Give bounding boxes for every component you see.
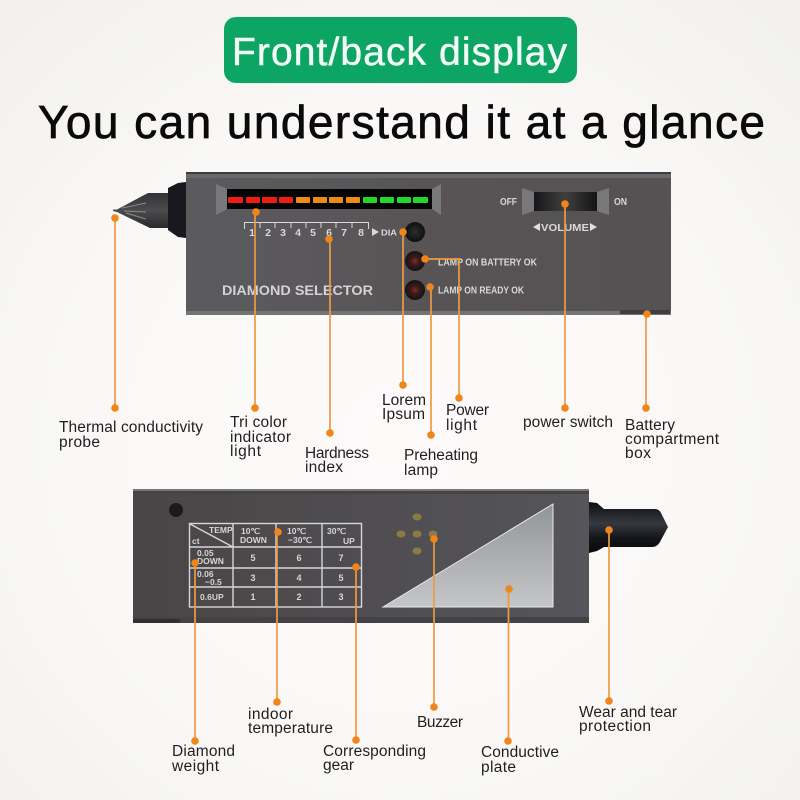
grade table: DOWN: [240, 535, 267, 545]
subtitle heading: You can understand it at a glance: [38, 96, 765, 148]
device body back: [133, 489, 589, 623]
grade table: 7: [338, 553, 344, 563]
callout: buzzer: Buzzer: [417, 714, 463, 731]
callout: hardness index: [305, 235, 369, 476]
callout: indoor temperature: indoor: [248, 706, 293, 723]
callout: hardness index: Hardness: [305, 445, 369, 462]
grade table: 30℃: [327, 526, 346, 536]
callouts: back device: [171, 526, 677, 776]
grade table: 2: [296, 592, 302, 602]
callout: thermal conductivity probe: [59, 214, 203, 451]
grade table: −0.5: [205, 577, 222, 587]
callout: thermal conductivity probe: Thermal conductivity: [59, 419, 203, 436]
callout: conductive plate: [481, 585, 559, 776]
conductive plate: [383, 504, 553, 607]
grade table: 10℃: [287, 526, 306, 536]
grade table: UP: [343, 536, 355, 546]
grade table: ct: [192, 536, 200, 546]
grade table: 0.05: [197, 548, 214, 558]
grade table: 6: [296, 553, 302, 563]
hardness scale: 1: [249, 227, 255, 239]
panel: back of device: [133, 489, 668, 623]
callout: power switch: [523, 200, 613, 431]
grade table: 5: [250, 553, 256, 563]
LED indicator meter: [216, 184, 441, 215]
title badge: [224, 17, 577, 83]
callout: corresponding gear: gear: [323, 757, 354, 774]
callout: power light: [421, 255, 489, 434]
grade table: 1: [250, 592, 256, 602]
volume switch: [500, 188, 627, 234]
icon: screw hole: [169, 503, 183, 517]
callout: power switch: power switch: [523, 414, 613, 431]
callout: conductive plate: plate: [481, 759, 516, 776]
callout: tri color indicator light: indicator: [230, 429, 291, 446]
callout: battery compartment box: [625, 310, 720, 462]
grade table: 3: [338, 592, 344, 602]
grade table: 0.6UP: [200, 592, 224, 602]
grade table: 4: [296, 573, 302, 583]
lamp captions: [438, 258, 538, 296]
callout: conductive plate: Conductive: [481, 744, 559, 761]
callout: diamond weight: Diamond: [172, 743, 235, 760]
device body front: [186, 172, 671, 315]
grade table: −30℃: [288, 535, 312, 545]
callout: buzzer: [417, 535, 463, 731]
volume switch: VOLUME: [541, 222, 589, 234]
icon: rear grip: [589, 502, 668, 553]
title badge: Front/back display: [232, 31, 568, 74]
callout: power light: light: [446, 417, 478, 434]
callout: wear and tear protection: [579, 526, 677, 735]
grade table: 0.06: [197, 569, 214, 579]
callout: lorem ipsum: [382, 228, 426, 423]
callout: preheating lamp: Preheating: [404, 447, 478, 464]
hardness scale: 8: [358, 227, 364, 239]
callout: corresponding gear: Corresponding: [323, 743, 426, 760]
grade table: 5: [338, 573, 344, 583]
buzzer holes: [396, 514, 438, 554]
callout: wear and tear protection: Wear and tear: [579, 704, 677, 721]
callout: lorem ipsum: Ipsum: [382, 406, 425, 423]
indicator buttons: [405, 222, 425, 300]
callout: wear and tear protection: protection: [579, 718, 651, 735]
callout: battery compartment box: box: [625, 445, 651, 462]
hardness scale: 5: [310, 227, 316, 239]
hardness scale: 7: [341, 227, 347, 239]
grade table: 10℃: [241, 526, 260, 536]
lamp captions: LAMP ON BATTERY OK: [438, 258, 538, 268]
callout: tri color indicator light: Tri color: [230, 414, 287, 431]
volume switch: ON: [614, 196, 627, 208]
callout: tri color indicator light: [230, 208, 291, 460]
volume switch: OFF: [500, 196, 517, 208]
lamp captions: LAMP ON READY OK: [438, 286, 525, 296]
callout: battery compartment box: compartment: [625, 431, 720, 448]
hardness scale: DIA: [381, 228, 397, 238]
grade table: TEMP: [209, 525, 233, 535]
callout: hardness index: index: [305, 459, 343, 476]
callout: indoor temperature: temperature: [248, 720, 333, 737]
grade table: DOWN: [197, 556, 224, 566]
hardness scale: 3: [280, 227, 286, 239]
callout: indoor temperature: [248, 528, 333, 737]
callout: power light: Power: [446, 402, 489, 419]
panel: front of device: [113, 172, 671, 315]
callout: battery compartment box: Battery: [625, 417, 675, 434]
callouts: front device: [59, 200, 720, 479]
icon: probe tip: [113, 182, 186, 238]
callout: diamond weight: weight: [171, 758, 220, 775]
callout: lorem ipsum: Lorem: [382, 392, 426, 409]
hardness scale: [244, 222, 397, 239]
device name label: DIAMOND SELECTOR: [222, 283, 373, 298]
grade table: [190, 524, 362, 607]
hardness scale: 2: [265, 227, 271, 239]
hardness scale: 6: [326, 227, 332, 239]
callout: tri color indicator light: light: [230, 443, 262, 460]
callout: thermal conductivity probe: probe: [59, 434, 100, 451]
hardness scale: 4: [295, 227, 301, 239]
callout: preheating lamp: [404, 283, 478, 479]
grade table: 3: [250, 573, 256, 583]
callout: preheating lamp: lamp: [404, 462, 438, 479]
callout: corresponding gear: [323, 563, 426, 774]
callout: diamond weight: [171, 559, 235, 775]
